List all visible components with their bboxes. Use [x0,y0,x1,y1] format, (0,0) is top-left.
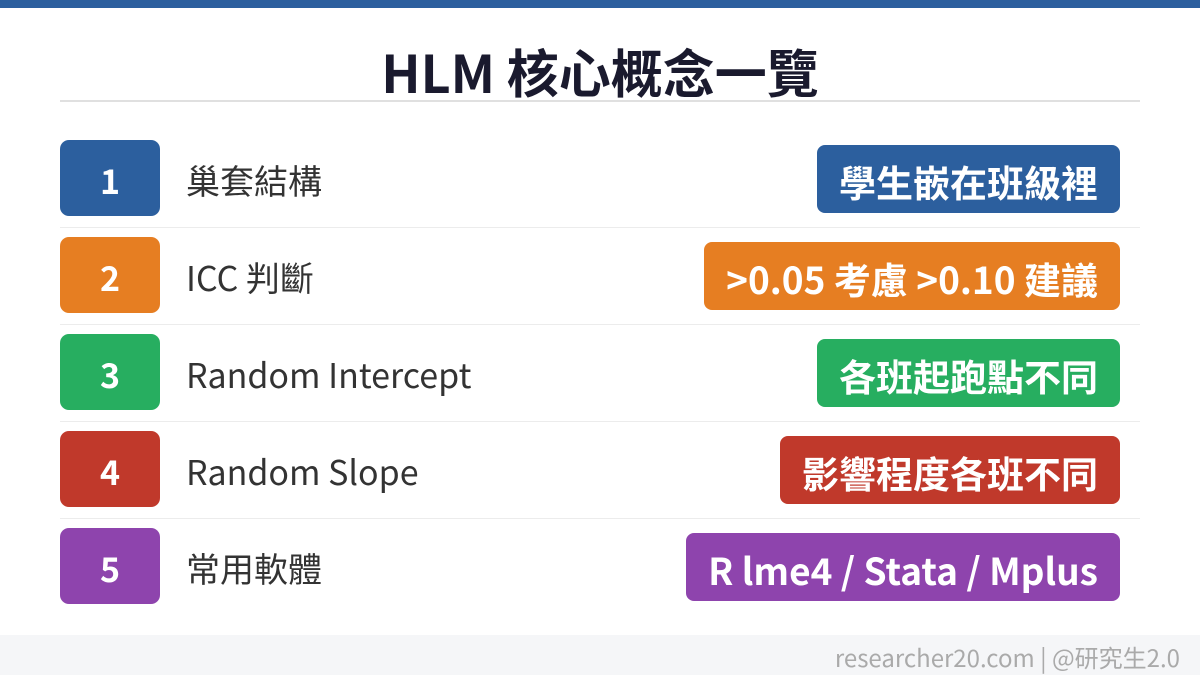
title: HLM 核心概念一覽 [381,33,819,108]
badge 4: 4 [100,446,120,495]
label 5: 常用軟體 [186,543,322,592]
badge 1: 1 [100,155,120,204]
pill 1 [817,145,1120,213]
pill 2: >0.05 考慮 >0.10 建議 [726,251,1098,305]
badge 2 [60,237,160,313]
footer credit: researcher20.com | @研究生2.0 [835,639,1180,674]
badge 1 [60,140,160,216]
label 2: ICC 判斷 [186,252,314,301]
row 4: random slope [60,431,1120,507]
pill 4 [780,436,1120,504]
label 3: Random Intercept [186,349,471,398]
row 5: software [60,528,1120,604]
badge 3: 3 [100,349,120,398]
pill 1: 學生嵌在班級裡 [839,154,1098,208]
footer [0,635,1200,675]
label 1: 巢套結構 [186,155,322,204]
badge 5: 5 [100,543,120,592]
pill 3: 各班起跑點不同 [839,348,1098,402]
pill 4: 影響程度各班不同 [802,445,1098,499]
badge 2: 2 [100,252,120,301]
pill 3 [817,339,1120,407]
row 1: nested structure [60,140,1120,216]
badge 4 [60,431,160,507]
label 4: Random Slope [186,446,419,495]
pill 5: R lme4 / Stata / Mplus [708,542,1098,596]
row 3: random intercept [60,334,1120,410]
badge 5 [60,528,160,604]
row 2: ICC [60,237,1120,313]
badge 3 [60,334,160,410]
